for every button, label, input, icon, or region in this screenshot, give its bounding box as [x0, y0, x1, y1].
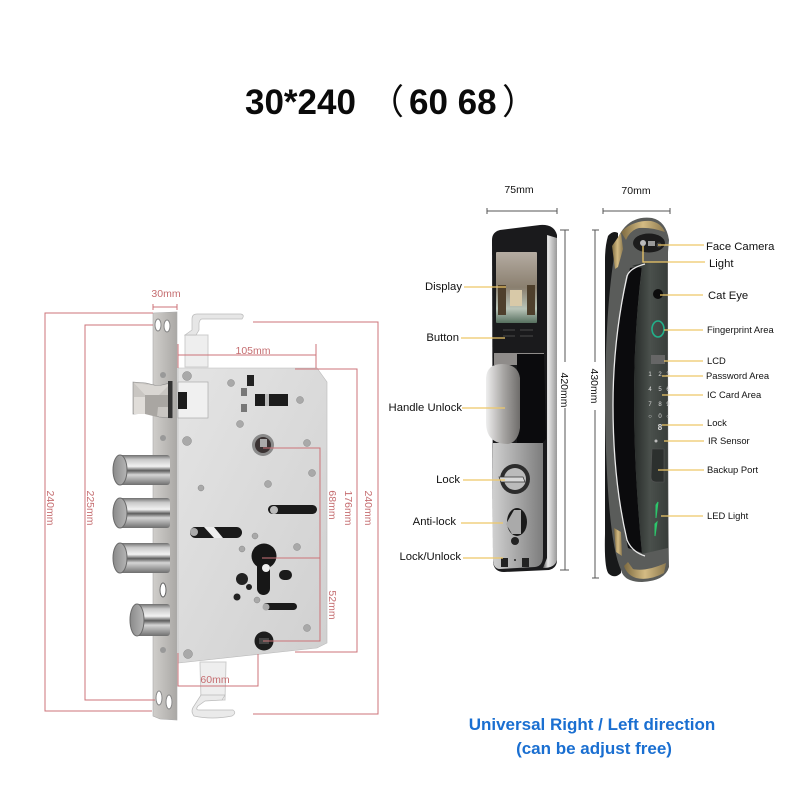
keypad [648, 372, 670, 442]
main side body [605, 218, 669, 582]
anti-lock knob [506, 508, 527, 545]
dimension labels: 52mm [326, 590, 338, 620]
dimension lines [45, 304, 378, 714]
glossy face [632, 262, 668, 554]
silver edge strip [543, 235, 557, 568]
title: （ [369, 83, 404, 122]
keypad: 8 [658, 423, 663, 432]
dimension labels: 240mm [44, 490, 56, 526]
side callouts: Cat Eye [708, 290, 748, 302]
dimension labels: 225mm [84, 490, 96, 526]
led light [655, 502, 658, 536]
blue note: (can be adjust free) [516, 739, 672, 758]
dimension labels: 176mm [342, 490, 354, 526]
latch [133, 381, 172, 418]
fingerprint ring [652, 321, 664, 337]
cat eye [653, 289, 663, 299]
dimension labels: 68mm [326, 490, 338, 520]
side lock panel [605, 218, 670, 582]
white edge line [613, 264, 645, 556]
title: ） [502, 83, 537, 122]
side callouts: Face Camera [706, 241, 775, 253]
keypad: 0 [658, 414, 662, 420]
keypad: 2 [658, 372, 662, 378]
keypad: 7 [648, 402, 652, 408]
bolt 2 [113, 498, 170, 528]
side callouts: Lock [707, 417, 727, 428]
handle [486, 364, 520, 444]
front width dimension [487, 208, 557, 214]
front callouts [389, 281, 506, 563]
bolt 3 [113, 543, 170, 573]
bolt 4 [130, 604, 170, 636]
side width dimension [603, 208, 670, 214]
side callouts [643, 241, 775, 521]
dimension labels [44, 288, 374, 686]
front body [492, 225, 557, 572]
keypad: 9 [666, 402, 670, 408]
front callouts: Lock/Unlock [399, 551, 461, 563]
title: 30*240 [245, 83, 356, 122]
side height label: 430mm [588, 368, 600, 404]
display [496, 252, 537, 323]
keypad: 6 [666, 387, 670, 393]
bottom strike hook [192, 662, 235, 718]
lock/unlock switches [501, 558, 529, 567]
gold trim [612, 221, 666, 579]
mortise lock [44, 288, 378, 720]
front lock panel [486, 225, 557, 572]
keypad: 1 [648, 372, 652, 378]
bolt 1 [113, 455, 170, 485]
front height label: 420mm [558, 372, 570, 408]
front height dimension [560, 230, 569, 570]
title: 60 68 [409, 83, 497, 122]
side callouts: IR Sensor [708, 435, 750, 446]
keypad: 3 [666, 372, 670, 378]
side height dimension [592, 230, 599, 578]
camera [633, 234, 665, 252]
blue note [469, 715, 715, 758]
backup port [651, 449, 664, 482]
side callouts: Password Area [706, 370, 770, 381]
keypad: ○ [648, 414, 652, 420]
side callouts: Light [709, 258, 734, 270]
blue note: Universal Right / Left direction [469, 715, 715, 734]
buttons [503, 330, 533, 336]
keypad: 8 [658, 402, 662, 408]
side callouts: Fingerprint Area [707, 324, 774, 335]
side callouts: LED Light [707, 510, 749, 521]
front callouts: Display [425, 281, 462, 293]
front callouts: Handle Unlock [389, 402, 462, 414]
side callouts: IC Card Area [707, 389, 762, 400]
front callouts: Button [426, 332, 459, 344]
keypad: ○ [666, 414, 670, 420]
keypad: 4 [648, 387, 652, 393]
dimension labels: 30mm [151, 288, 181, 300]
title [245, 83, 537, 122]
lower plate [493, 443, 543, 569]
top strike hook [185, 314, 243, 367]
body details [178, 372, 317, 658]
side callouts: LCD [707, 355, 726, 366]
front callouts: Lock [436, 474, 460, 486]
faceplate [153, 312, 177, 720]
dimension labels: 60mm [200, 674, 230, 686]
thumb turn [499, 464, 530, 494]
front callouts: Anti-lock [413, 516, 456, 528]
lcd [651, 355, 665, 364]
front width label: 75mm [504, 184, 534, 196]
back shell [605, 232, 621, 576]
side width label: 70mm [621, 185, 651, 197]
keypad: 5 [658, 387, 662, 393]
side callouts: Backup Port [707, 464, 758, 475]
neck plate and handle slot [494, 353, 544, 365]
inner black section [613, 266, 642, 553]
dimension labels: 240mm [362, 490, 374, 526]
lock body [178, 368, 327, 663]
dimension labels: 105mm [235, 345, 271, 357]
